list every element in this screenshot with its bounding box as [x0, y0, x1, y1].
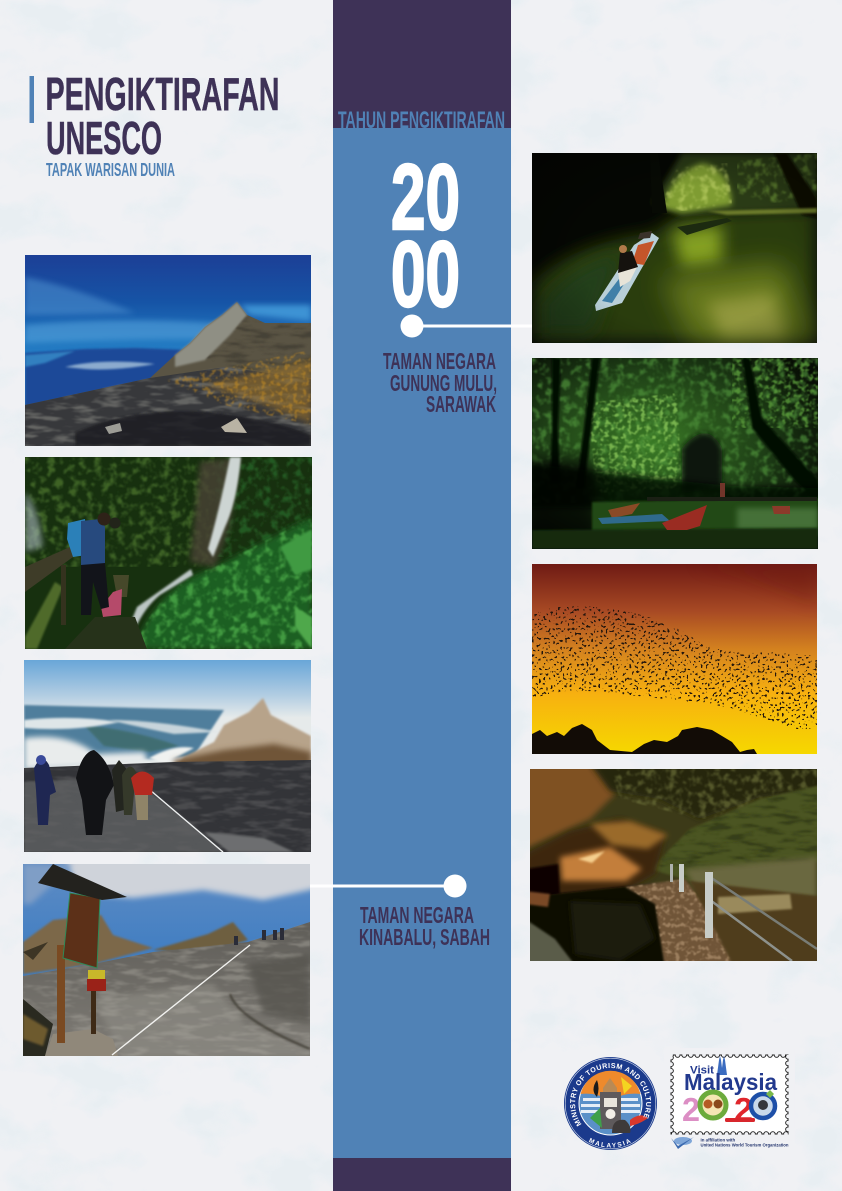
Kuala Lumpur towers [717, 1056, 727, 1075]
UNWTO affiliation [671, 1137, 789, 1149]
label: Gunung Mulu: GUNUNG MULU, [390, 370, 497, 396]
connector: Kinabalu [310, 874, 466, 898]
boat [595, 231, 659, 311]
Visit Malaysia wordmark: Visit [690, 1064, 714, 1076]
photo: Deer Cave walkway [530, 769, 817, 961]
information sign [38, 864, 127, 1043]
logo: Visit Malaysia 2020 stamp: Malaysia [684, 1069, 777, 1095]
label: Gunung Mulu: SARAWAK [426, 391, 496, 417]
label: Gunung Mulu: TAMAN NEGARA [383, 348, 496, 374]
emblem ring text: MINISTRY OF TOURISM AND CULTURE [570, 1063, 652, 1126]
photo: boat on Melinau river [532, 153, 817, 343]
building emblem [590, 1077, 648, 1133]
tree silhouette [532, 724, 757, 754]
label: Kinabalu: KINABALU, SABAH [359, 924, 490, 950]
2020 numerals: 2 [734, 1091, 753, 1128]
photo: Low's Peak blue sky [25, 255, 311, 446]
rope [112, 945, 250, 1055]
year 2000: 20 [391, 145, 460, 249]
footbridge [647, 497, 817, 501]
logo: Ministry of Tourism and Culture [564, 1057, 657, 1150]
year 2000: 00 [391, 222, 460, 326]
logo: Ministry of Tourism and Culture: MALAYSIA [588, 1138, 631, 1148]
title accent bar [30, 76, 34, 123]
title block: UNESCO [46, 112, 162, 164]
rope [150, 790, 223, 852]
railing [670, 864, 817, 961]
subheading: TAPAK WARISAN DUNIA [46, 159, 175, 180]
photo: hikers at summit plateau [24, 660, 311, 852]
column heading: TAHUN PENGIKTIRAFAN [338, 107, 505, 134]
stamp frame [667, 1051, 792, 1138]
UNWTO affiliation: United Nations World Tourism Organization [700, 1142, 789, 1148]
photo: bats at sunset [532, 564, 817, 754]
label: Kinabalu [359, 902, 490, 950]
2020 numerals [682, 1090, 775, 1128]
photo: waterfall hikers [25, 457, 312, 649]
bat swarm [532, 606, 817, 729]
hiker figures [67, 512, 129, 617]
label: Kinabalu: TAMAN NEGARA [360, 902, 474, 928]
hikers [34, 750, 154, 835]
2020 numerals: 2 [682, 1091, 700, 1128]
UNWTO affiliation: In affiliation with [700, 1138, 735, 1142]
photo: forest river with boats [532, 358, 818, 549]
title block [30, 68, 280, 180]
central timeline column [333, 0, 511, 1191]
year 2000 [391, 145, 460, 326]
label: Gunung Mulu [383, 348, 497, 417]
photo: signpost at KM8 [23, 864, 310, 1056]
boats [598, 503, 790, 530]
distant hikers [234, 928, 284, 945]
heading: PENGIKTIRAFAN [46, 68, 280, 120]
connector: Gunung Mulu [400, 314, 534, 338]
logo: Visit Malaysia 2020 stamp [667, 1051, 792, 1149]
